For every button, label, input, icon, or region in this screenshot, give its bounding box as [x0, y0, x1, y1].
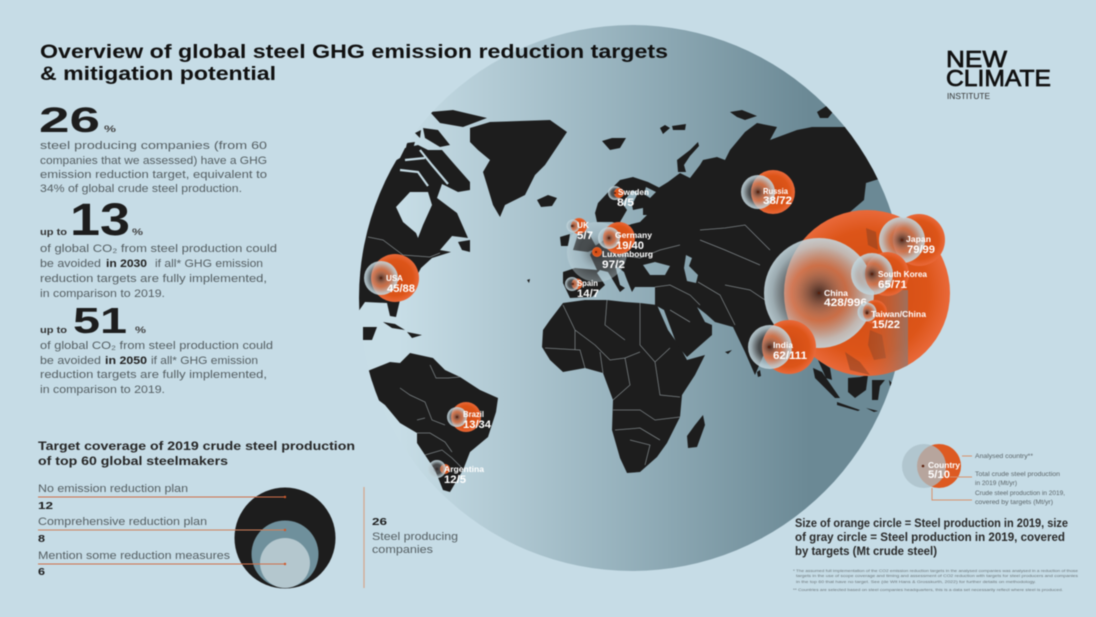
- bubble: India: India: [773, 340, 793, 350]
- heading: target coverage: Target coverage of 2019 crude steel production: [38, 441, 355, 453]
- legend: bubble key: covered by targets (Mt/yr): [975, 500, 1053, 506]
- bubble: Spain: Spain: [577, 278, 598, 288]
- stat: up to 13 percent: reduction targets are fully implemented,: [40, 273, 267, 285]
- bubble: Japan: Japan: [906, 234, 931, 244]
- bubble: Sweden: Sweden: [618, 187, 649, 197]
- bubble: USA: 45/88: [387, 283, 415, 295]
- legend: size explanation: Size of orange circle = Steel production in 2019, size: [795, 518, 1068, 530]
- map: South America: [365, 353, 498, 492]
- bubble: Argentina: [428, 460, 484, 486]
- nested circle chart: [234, 488, 336, 588]
- legend: bubble key: Crude steel production in 2019,: [975, 491, 1065, 497]
- stat: up to 51 percent: in 2050: [105, 355, 147, 367]
- chart labels: Comprehensive reduction plan: [38, 516, 207, 528]
- stat: up to 51 percent: in comparison to 2019.: [40, 384, 165, 396]
- bubble: Germany: Germany: [615, 230, 652, 240]
- bubble: Japan: 79/99: [907, 244, 935, 256]
- bubble: Japan: [879, 214, 945, 266]
- total bracket: 26 steel producing companies: companies: [372, 544, 434, 556]
- map: Southeast Asia islands: [757, 360, 893, 412]
- footnotes: in the top 60 that have no target. See (de Wit Hans & Grosskurth, 2022) for further details on methodology.: [796, 580, 1036, 584]
- legend: bubble key: Country: [928, 460, 960, 470]
- legend: bubble key: [902, 444, 1065, 506]
- bubble: Russia: [741, 170, 795, 214]
- stat: up to 51 percent: %: [135, 325, 146, 335]
- bubble: Brazil: 13/34: [463, 419, 492, 431]
- bubble: South Korea: [851, 252, 927, 296]
- title: & mitigation potential: [40, 63, 276, 85]
- legend: size explanation: [795, 518, 1068, 558]
- stat: up to 13 percent: 13: [70, 194, 130, 245]
- bubble: Argentina: 12/5: [444, 474, 466, 486]
- bubble: India: 62/111: [773, 350, 807, 362]
- stat: 26 percent: emission reduction target, equivalent to: [40, 169, 267, 181]
- bubble: Spain: 14/7: [577, 288, 599, 300]
- bubble: Russia: 38/72: [763, 195, 792, 207]
- bubble: Luxembourg: [567, 222, 653, 282]
- footnotes: [793, 569, 1078, 592]
- stat: up to 51 percent: up to: [40, 325, 67, 336]
- stat: up to 51 percent: [40, 300, 273, 396]
- bubble: China: [764, 210, 950, 376]
- stat: up to 51 percent: of global CO₂ from steel production could: [40, 340, 273, 352]
- map: Arctic Canada and Greenland: [405, 110, 567, 217]
- stat: up to 13 percent: in 2030: [106, 258, 147, 270]
- bubble: South Korea: South Korea: [878, 269, 927, 279]
- chart labels: 8: [38, 533, 45, 545]
- map: Arctic channels: [400, 150, 448, 186]
- logo: NewClimate Institute: INSTITUTE: [947, 91, 990, 101]
- bubble: Brazil: Brazil: [463, 409, 484, 419]
- logo: NewClimate Institute: [946, 46, 1051, 101]
- bubble: Sweden: [608, 186, 649, 209]
- land seen through China bubble: [845, 228, 886, 375]
- map: Scandinavia and northern islands: [560, 105, 836, 252]
- stat: up to 13 percent: [40, 194, 277, 300]
- bubble: Brazil: [447, 402, 492, 432]
- total bracket: 26 steel producing companies: 26: [372, 516, 387, 528]
- legend: bubble key: Total crude steel production: [975, 472, 1060, 478]
- stat: 26 percent: [39, 101, 267, 195]
- bubble: South Korea: 65/71: [878, 279, 907, 291]
- stat: up to 13 percent: %: [132, 227, 143, 237]
- footnotes: ** Countries are selected based on steel companies headquarters, this is a data set necessarily reflect where steel is produced.: [793, 588, 1063, 592]
- bubble: Germany: [598, 222, 652, 254]
- map: inland seas: [620, 187, 698, 283]
- bubble: China: China: [824, 288, 848, 298]
- bubble: Spain: [565, 277, 599, 300]
- stat: up to 13 percent: if all* GHG emission: [155, 258, 263, 270]
- stat: up to 13 percent: be avoided: [40, 258, 101, 270]
- logo: NewClimate Institute: NEW: [946, 46, 1008, 72]
- legend: bubble key: Analysed country**: [975, 454, 1034, 460]
- logo: NewClimate Institute: CLIMATE: [946, 65, 1051, 91]
- map: North America: [358, 144, 471, 318]
- chart labels: 6: [38, 566, 45, 578]
- bubble: Sweden: 8/5: [617, 197, 634, 209]
- legend: size explanation: by targets (Mt crude steel): [795, 546, 937, 558]
- stat: 26 percent: %: [104, 124, 116, 134]
- map: Eurasia: [563, 123, 882, 375]
- bubble: UK: UK: [577, 220, 590, 230]
- stat: up to 13 percent: up to: [40, 227, 67, 238]
- bubble: Germany: 19/40: [616, 240, 644, 252]
- footnotes: * The assumed full implementation of the CO2 emission reduction targets in the analysed companies was analysed in a reduction of those: [793, 569, 1078, 573]
- bubble: Argentina: Argentina: [444, 464, 484, 474]
- stat: 26 percent: companies that we assessed) have a GHG: [40, 155, 267, 167]
- legend: bubble key: 5/10: [928, 469, 950, 481]
- stat: 26 percent: 26: [39, 101, 100, 140]
- legend: bubble key: in 2019 (Mt/yr): [975, 481, 1017, 487]
- bubble: USA: [364, 254, 419, 302]
- total bracket: 26 steel producing companies: Steel producing: [372, 531, 458, 543]
- title: [40, 41, 668, 85]
- heading: target coverage: of top 60 global steelmakers: [38, 456, 228, 468]
- bubble: Taiwan/China: Taiwan/China: [871, 309, 926, 319]
- bubble: UK: 5/7: [577, 230, 593, 242]
- total bracket: 26 steel producing companies: [364, 487, 458, 588]
- chart labels: [38, 483, 286, 578]
- map: Madagascar and islands: [527, 279, 732, 448]
- stat: up to 51 percent: be avoided: [40, 355, 101, 367]
- bubble: India: [748, 320, 816, 374]
- bubble: Luxembourg: 97/2: [602, 259, 625, 271]
- map: Asia borders: [368, 225, 770, 325]
- China coverage band: [874, 290, 908, 375]
- stat: up to 51 percent: if all* GHG emission: [151, 355, 258, 367]
- chart labels: 12: [38, 500, 53, 512]
- legend: size explanation: of gray circle = Steel production in 2019, covered: [795, 532, 1065, 544]
- stat: 26 percent: steel producing companies (from 60: [40, 140, 267, 152]
- footnotes: targets in the use of scope coverage and timing and assessment of CO2 reduction with targets for steel producers and companies: [796, 574, 1078, 578]
- stat: up to 13 percent: of global CO₂ from steel production could: [40, 243, 277, 255]
- stat: up to 13 percent: in comparison to 2019.: [40, 288, 165, 300]
- bubble: Taiwan/China: [858, 300, 926, 331]
- stat: up to 51 percent: reduction targets are fully implemented,: [40, 369, 267, 381]
- bubble: USA: USA: [386, 273, 403, 283]
- bubble: Taiwan/China: 15/22: [872, 319, 900, 331]
- bubble: Russia: Russia: [763, 186, 788, 196]
- map: Africa: [542, 300, 705, 473]
- stat: 26 percent: 34% of global crude steel production.: [40, 183, 242, 195]
- chart labels: Mention some reduction measures: [38, 550, 231, 562]
- bubble: Luxembourg: Luxembourg: [602, 249, 653, 259]
- world map globe: [340, 25, 905, 571]
- bubble: China: 428/996: [824, 297, 867, 309]
- heading: target coverage: [38, 441, 355, 468]
- chart labels: No emission reduction plan: [38, 483, 188, 495]
- title: Overview of global steel GHG emission reduction targets: [40, 41, 668, 63]
- bubble: UK: [566, 218, 593, 242]
- stat: up to 51 percent: 51: [73, 300, 127, 341]
